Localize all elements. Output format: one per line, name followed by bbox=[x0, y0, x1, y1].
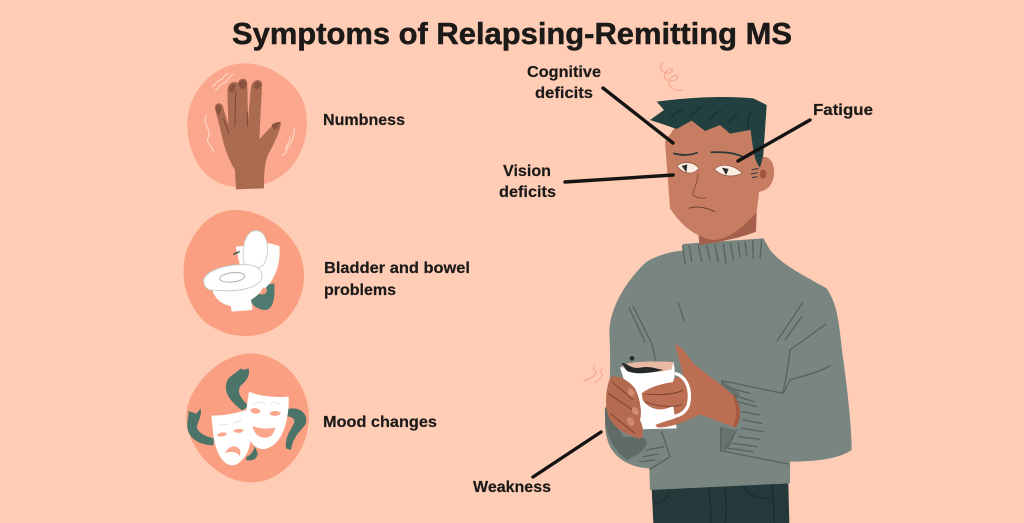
label: numbness: Numbness bbox=[323, 112, 405, 129]
panel: numbness bbox=[187, 63, 405, 189]
neck bbox=[698, 212, 757, 245]
panel: man with mug bbox=[583, 62, 852, 523]
icon: toilet in blob bbox=[183, 210, 304, 336]
icon: numb hand in blob bbox=[187, 63, 307, 189]
fingers in handle bbox=[642, 382, 683, 409]
label: bladder and bowel problems: problems bbox=[324, 282, 396, 299]
numbness squiggle left bbox=[205, 115, 213, 152]
sweater bbox=[605, 238, 852, 490]
pointer: cognitive deficits bbox=[603, 88, 673, 143]
label: weakness: Weakness bbox=[473, 479, 551, 496]
label: cognitive deficits: Cognitive bbox=[527, 64, 601, 81]
title: Symptoms of Relapsing-Remitting MS bbox=[232, 16, 792, 51]
face bbox=[665, 120, 760, 240]
label: vision deficits: deficits bbox=[499, 184, 556, 201]
near hand bbox=[606, 376, 643, 439]
hands and mug bbox=[606, 345, 740, 439]
ear bbox=[758, 157, 774, 192]
label: cognitive deficits: deficits bbox=[535, 85, 593, 102]
far hand back bbox=[642, 345, 737, 427]
label: mood changes: Mood changes bbox=[323, 414, 437, 431]
icon: theatre masks in blob bbox=[186, 353, 309, 482]
icon: confusion spiral bbox=[661, 62, 683, 90]
numbness squiggle right bbox=[282, 128, 294, 156]
icon: tremor squiggle bbox=[583, 365, 602, 383]
hair bbox=[650, 97, 767, 168]
label: fatigue: Fatigue bbox=[813, 102, 873, 119]
mug bbox=[620, 362, 677, 429]
label: bladder and bowel problems: Bladder and bowel bbox=[324, 260, 470, 277]
thumb fingertip over mug bbox=[655, 410, 700, 427]
trousers bbox=[652, 483, 789, 523]
numbness squiggles bbox=[212, 73, 233, 90]
panel: bladder and bowel bbox=[183, 210, 470, 336]
panel: mood changes bbox=[186, 353, 437, 482]
pointer: fatigue bbox=[738, 120, 810, 161]
label: vision deficits: Vision bbox=[503, 163, 551, 180]
pointer: weakness bbox=[533, 432, 601, 477]
pointer: vision deficits bbox=[565, 175, 673, 182]
